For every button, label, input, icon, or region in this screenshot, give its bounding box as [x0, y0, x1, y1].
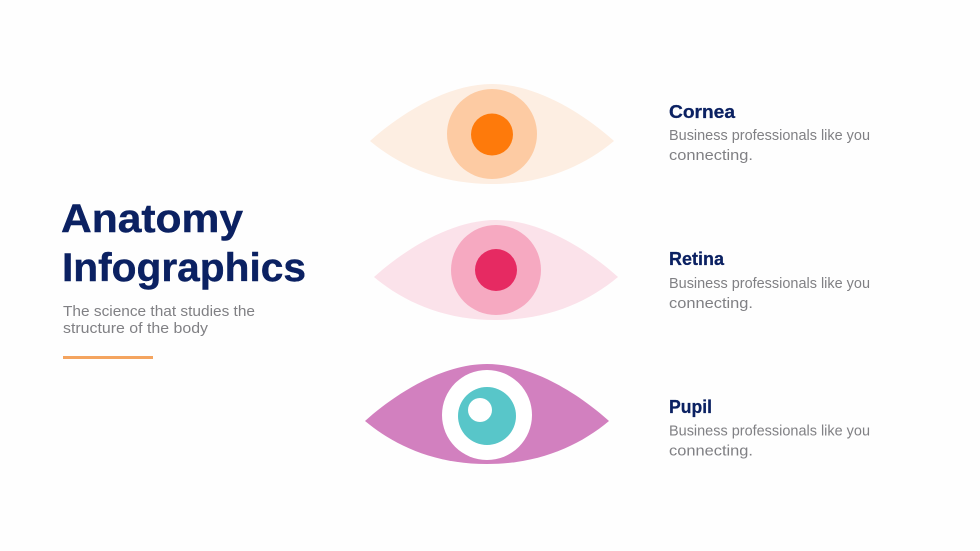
icon: retina eye [374, 220, 618, 320]
icon: cornea eye [370, 84, 614, 184]
text block: retina [669, 248, 870, 312]
accent underline [63, 356, 153, 359]
subtitle: The science that studies the [63, 303, 255, 320]
text block: pupil: Pupil [669, 396, 712, 417]
title: Infographics [62, 246, 306, 290]
text block: cornea [669, 101, 870, 164]
text block: cornea: Cornea [669, 101, 736, 122]
text block: retina: Business professionals like you [669, 275, 870, 292]
text block: retina: connecting. [669, 295, 753, 312]
subtitle: structure of the body [63, 320, 209, 337]
title: Anatomy [61, 197, 244, 241]
title [61, 197, 306, 290]
text block: cornea: Business professionals like you [669, 127, 870, 144]
text block: cornea: connecting. [669, 147, 753, 164]
subtitle [63, 303, 255, 337]
text block: pupil [669, 396, 870, 460]
text block: pupil: Business professionals like you [669, 422, 870, 440]
icon: pupil eye [365, 364, 609, 464]
text block: pupil: connecting. [669, 442, 753, 460]
text block: retina: Retina [669, 248, 725, 269]
